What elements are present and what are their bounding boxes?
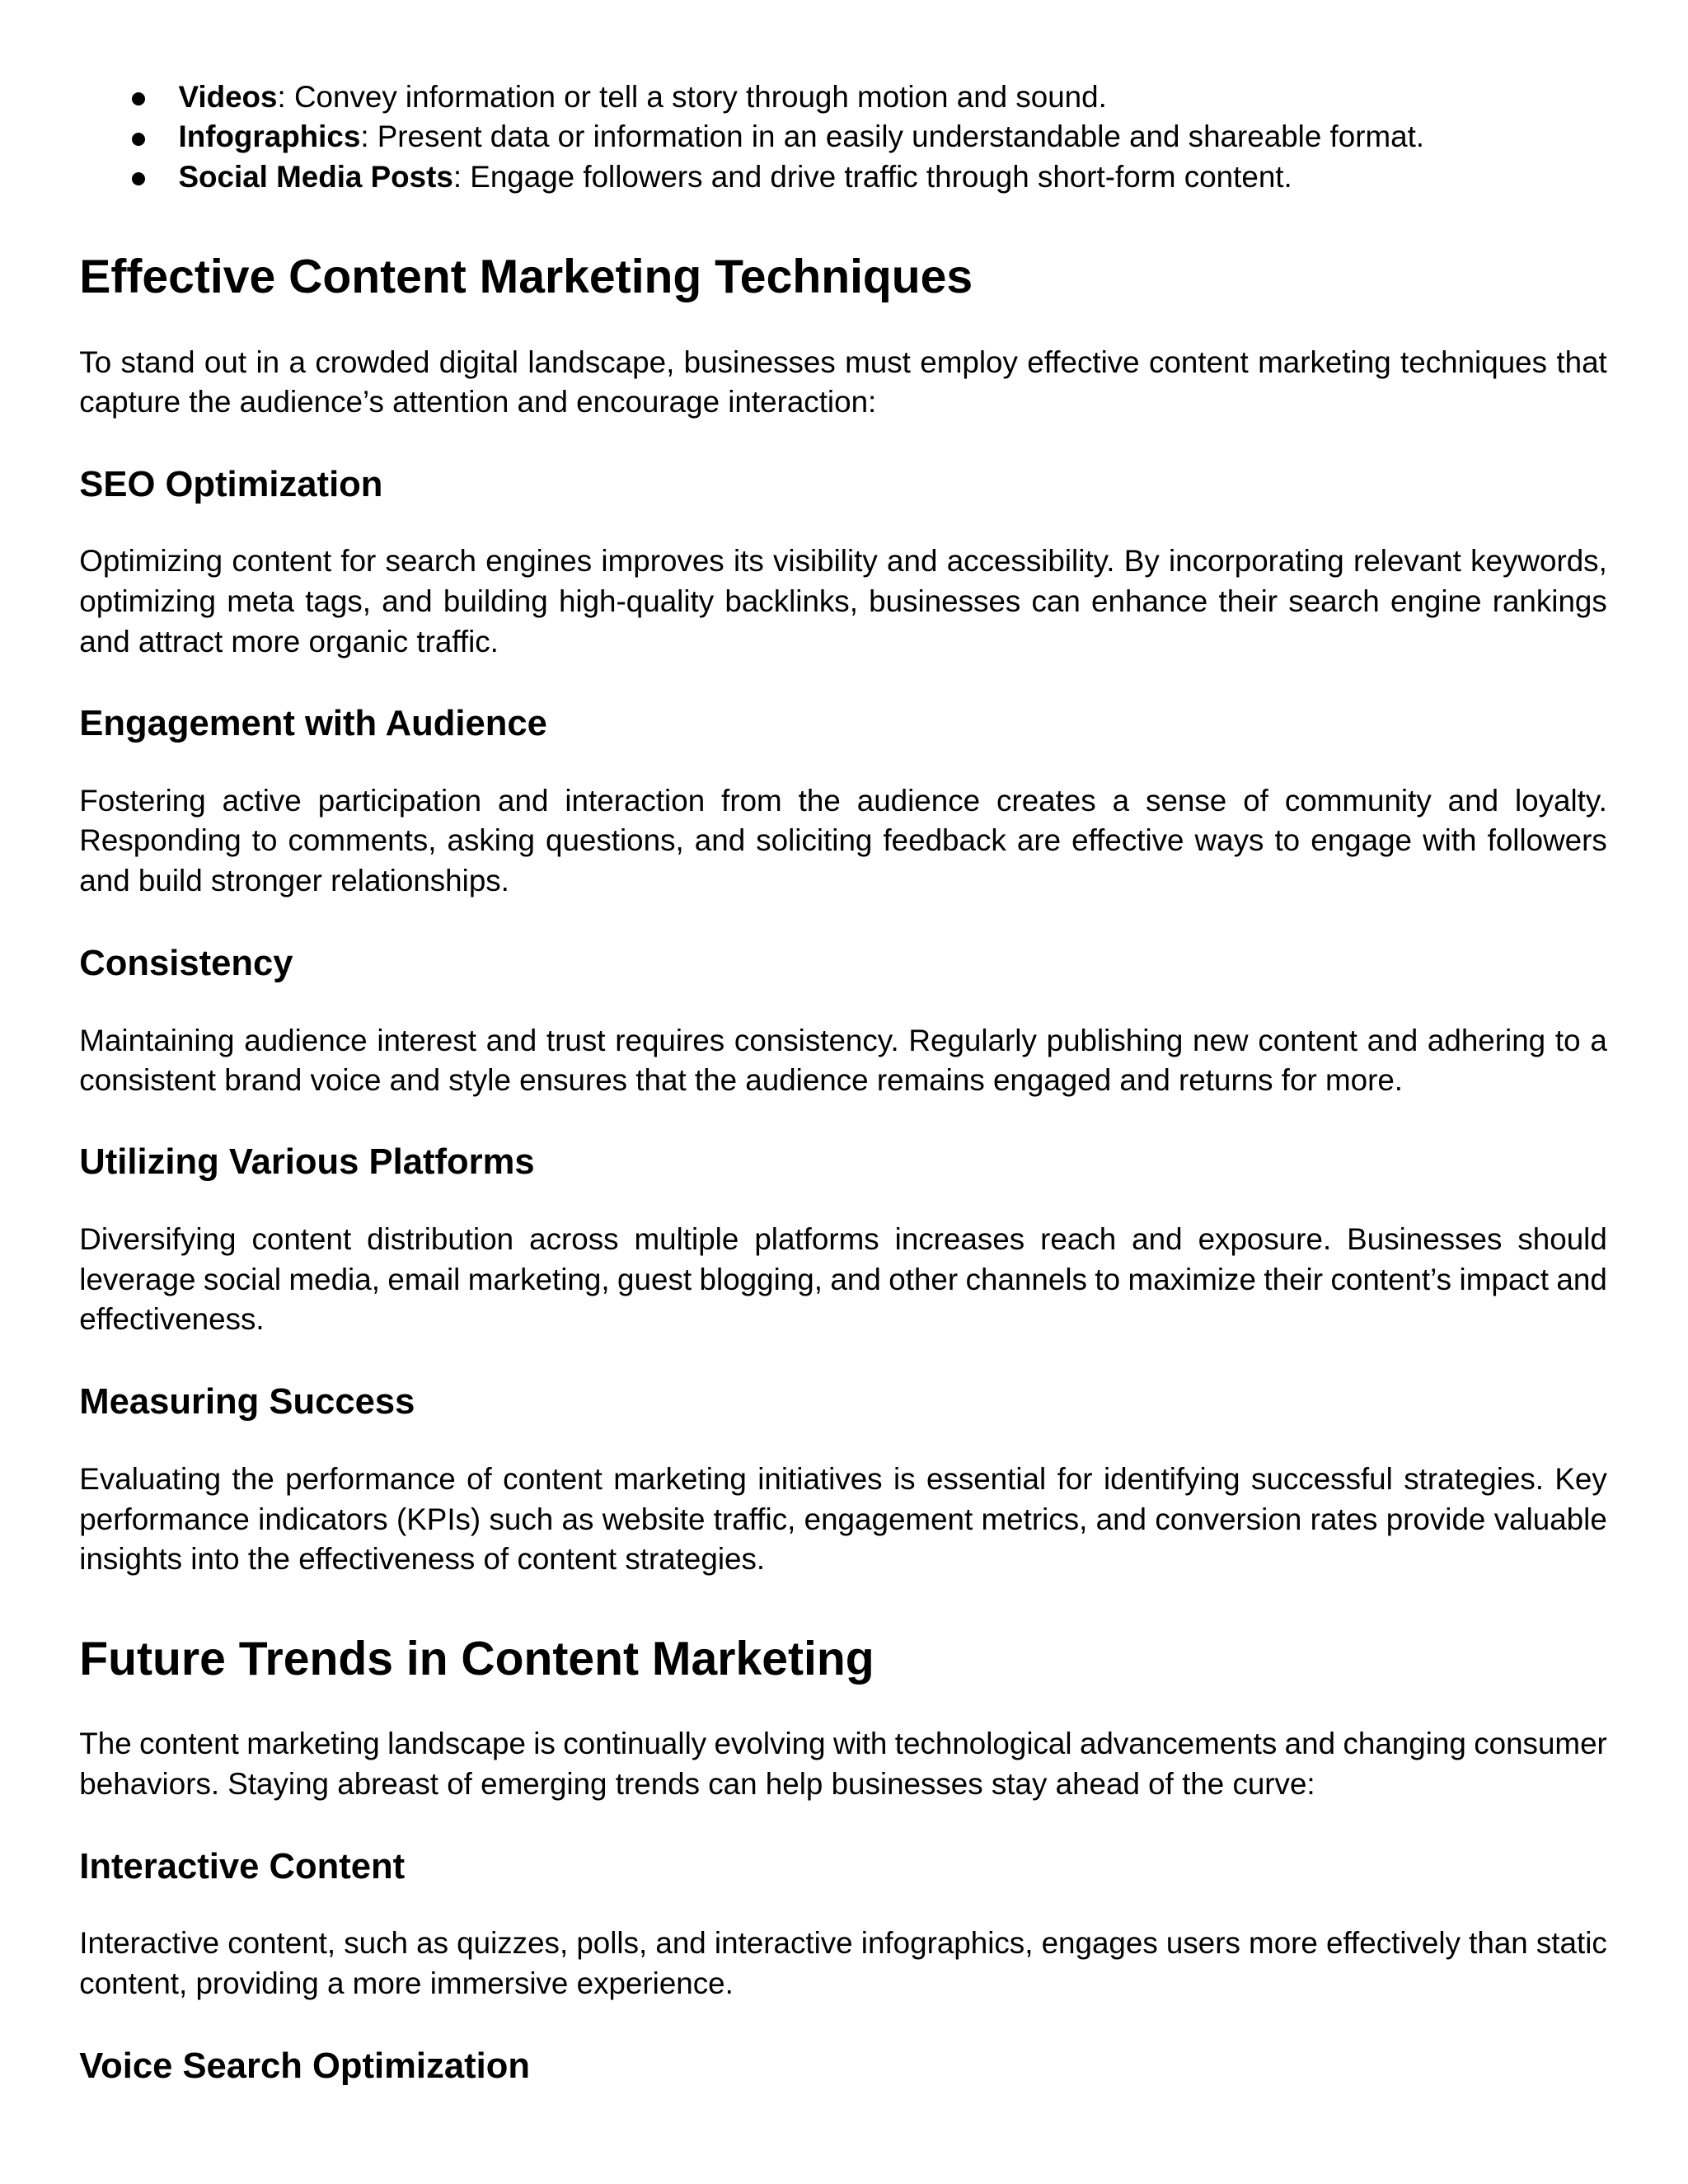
- text block: SEO optimization: Optimizing content for search engines improves its visibility and accessibility. By incorporating relevant keywords,: [79, 544, 1607, 578]
- bullet: infographics: Infographics: Present data or information in an easily understandable and shareable format.: [178, 120, 1424, 153]
- text block: utilizing various platforms: leverage social media, email marketing, guest blogging, and other channels to maximize their content’s impact and: [79, 1263, 1607, 1296]
- text block: engagement with audience: Responding to comments, asking questions, and soliciting feedback are effective ways to engage with followers: [79, 823, 1607, 857]
- text block: measuring success: performance indicators (KPIs) such as website traffic, engagement metrics, and conversion rates provide valuable: [79, 1502, 1607, 1536]
- text block: SEO optimization: [79, 544, 1607, 658]
- text block: techniques intro: To stand out in a crowded digital landscape, businesses must employ effective content marketing techniques that: [79, 345, 1607, 379]
- text block: measuring success: [79, 1462, 1607, 1576]
- text block: consistency: [79, 1024, 1607, 1097]
- subheading: utilizing various platforms: Utilizing Various Platforms: [79, 1142, 535, 1182]
- text block: SEO optimization: and attract more organic traffic.: [79, 625, 499, 658]
- text block: future trends intro: The content marketing landscape is continually evolving with technological advancements and changing consumer: [79, 1727, 1607, 1760]
- heading: future trends in content marketing: Future Trends in Content Marketing: [79, 1633, 874, 1685]
- text block: techniques intro: [79, 345, 1607, 419]
- subheading: measuring success: Measuring Success: [79, 1382, 415, 1422]
- text block: measuring success: insights into the effectiveness of content strategies.: [79, 1542, 765, 1576]
- text block: utilizing various platforms: effectiveness.: [79, 1302, 265, 1336]
- bullet: social media posts: Social Media Posts: Engage followers and drive traffic through short-form content.: [178, 160, 1292, 194]
- text block: consistency: Maintaining audience interest and trust requires consistency. Regularly publishing new content and adhering to a: [79, 1024, 1607, 1057]
- bullet list: content types: [132, 79, 1424, 194]
- heading: effective content marketing techniques: Effective Content Marketing Techniques: [79, 251, 973, 303]
- text block: techniques intro: capture the audience’s attention and encourage interaction:: [79, 385, 876, 419]
- text block: engagement with audience: and build stronger relationships.: [79, 864, 509, 898]
- subheading: voice search optimization: Voice Search Optimization: [79, 2046, 530, 2086]
- bullet: videos: Videos: Convey information or tell a story through motion and sound.: [178, 79, 1107, 114]
- text block: measuring success: Evaluating the performance of content marketing initiatives is essential for identifying successful strategies. Key: [79, 1462, 1607, 1496]
- subheading: SEO optimization: SEO Optimization: [79, 465, 382, 504]
- subheading: engagement with audience: Engagement with Audience: [79, 704, 547, 743]
- text block: engagement with audience: [79, 784, 1607, 898]
- text block: consistency: consistent brand voice and style ensures that the audience remains engaged and returns for more.: [79, 1063, 1403, 1097]
- text block: engagement with audience: Fostering active participation and interaction from the audience creates a sense of community and loyalty.: [79, 784, 1607, 818]
- text block: future trends intro: behaviors. Staying abreast of emerging trends can help businesses stay ahead of the curve:: [79, 1767, 1315, 1801]
- text block: utilizing various platforms: Diversifying content distribution across multiple platforms increases reach and exposure. Businesses should: [79, 1222, 1607, 1256]
- text block: interactive content: content, providing a more immersive experience.: [79, 1966, 734, 2000]
- subheading: interactive content: Interactive Content: [79, 1847, 405, 1886]
- text block: future trends intro: [79, 1727, 1607, 1801]
- text block: utilizing various platforms: [79, 1222, 1607, 1336]
- text block: interactive content: Interactive content, such as quizzes, polls, and interactive infographics, engages users more effectively than static: [79, 1926, 1607, 1960]
- text block: interactive content: [79, 1926, 1607, 2000]
- text block: SEO optimization: optimizing meta tags, and building high-quality backlinks, businesses can enhance their search engine rankings: [79, 584, 1607, 618]
- subheading: consistency: Consistency: [79, 944, 293, 983]
